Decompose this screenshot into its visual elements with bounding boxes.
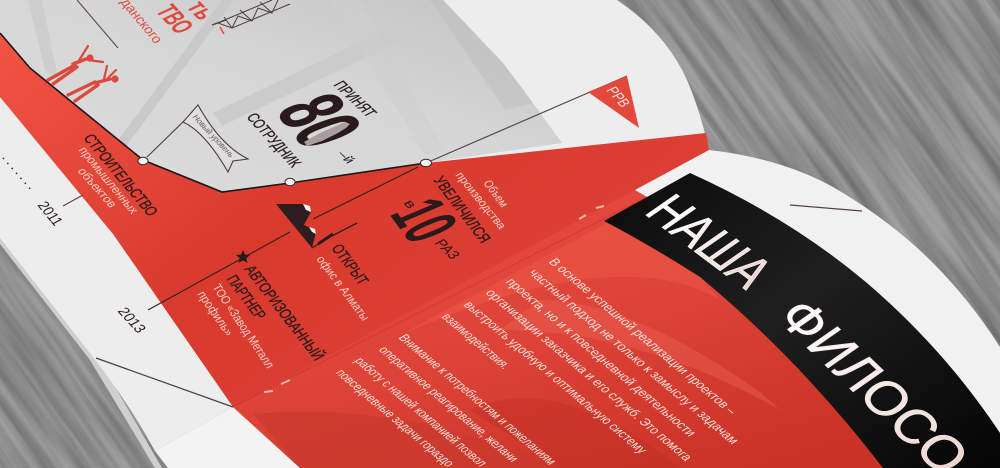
panel: lower right page	[635, 150, 1000, 468]
text: authorized partner	[194, 262, 329, 371]
text: hired 80th employee	[242, 79, 382, 170]
text: production volume increased 10 times: УВЕЛИЧИЛСЯ	[429, 174, 493, 246]
text: construction of industrial facilities: объектов	[74, 166, 120, 210]
bottom leader line	[96, 358, 233, 407]
fold dashes	[264, 206, 604, 392]
icon: star	[236, 250, 250, 263]
text: hired 80th employee: СОТРУДНИК	[242, 111, 304, 170]
thin line toward flag	[426, 76, 627, 163]
text: authorized partner: ПАРТНЕР	[222, 273, 269, 322]
top red heading fragments	[117, 0, 223, 46]
panel: black heading band	[604, 173, 1000, 468]
year 2013 with timeline segment	[113, 167, 418, 336]
timeline outline	[0, 33, 426, 192]
text block: philosophy paragraph one: взаимодействия.	[438, 311, 514, 371]
text: production volume increased 10 times: Объем	[480, 178, 511, 209]
red timeline area	[0, 33, 709, 407]
text: office opened in Almaty: ОТКРЫТ	[327, 242, 371, 288]
flag: РРВ pennant	[588, 76, 639, 128]
fold shadow line	[233, 197, 647, 407]
grey photo area	[0, 0, 562, 192]
text: office opened in Almaty: офис в Алматы	[313, 254, 373, 323]
text block: philosophy paragraph one: частный подход не только к замыслу и задачам	[525, 267, 743, 446]
year 2011 with dotted line: 2011	[33, 199, 66, 229]
panel: lower page red field	[233, 175, 890, 468]
text: office opened in Almaty	[313, 242, 373, 323]
icon: person in zero	[304, 122, 350, 146]
top red heading fragments: ТВО	[150, 0, 200, 38]
line from top heading	[77, 0, 118, 48]
text block: philosophy paragraph one: В основе успешной реализации проектов –	[545, 256, 741, 417]
icon: new level flag	[147, 105, 248, 172]
icon: mountains and road for Almaty office	[276, 204, 357, 248]
timeline markers	[138, 157, 432, 186]
text: construction of industrial facilities: промышленных	[75, 145, 142, 217]
text: construction of industrial facilities	[74, 132, 160, 219]
text: production volume increased 10 times: в	[400, 197, 421, 211]
panel: lower left page sliver	[155, 407, 300, 468]
white page sheet	[0, 0, 709, 451]
text: production volume increased 10 times: 10	[374, 188, 475, 252]
text: authorized partner: профиль»	[194, 289, 236, 338]
heading: НАША: НАША	[633, 186, 786, 297]
page thickness edge	[0, 234, 162, 468]
icon: new level flag: Новый уровень	[190, 113, 237, 159]
text: hired 80th employee: ПРИНЯТ	[329, 79, 379, 120]
text block: philosophy paragraph one	[438, 256, 743, 463]
text: production volume increased 10 times: производства	[452, 170, 510, 231]
tower lattice icon	[212, 0, 290, 34]
decorative line on lower page	[790, 205, 862, 211]
text: construction of industrial facilities: СТРОИТЕЛЬСТВО	[79, 132, 160, 219]
year 2013 with timeline segment: 2013	[113, 305, 149, 336]
panel: upper page	[0, 0, 709, 468]
text: hired 80th employee: 80	[257, 83, 382, 158]
text: authorized partner: ТОО «Завод Металл	[209, 282, 277, 371]
text: hired 80th employee: –й	[334, 148, 358, 166]
year 2011 with dotted line	[3, 158, 83, 229]
text: production volume increased 10 times	[374, 170, 511, 262]
flag: РРВ pennant: РРВ	[602, 85, 634, 110]
icon: two raised-hands people	[48, 46, 119, 101]
text block: philosophy paragraph one: проекта, но и к повседневной деятельности	[502, 276, 700, 438]
text: authorized partner: АВТОРИЗОВАННЫЙ	[240, 262, 329, 363]
text: production volume increased 10 times: РАЗ	[430, 237, 463, 262]
